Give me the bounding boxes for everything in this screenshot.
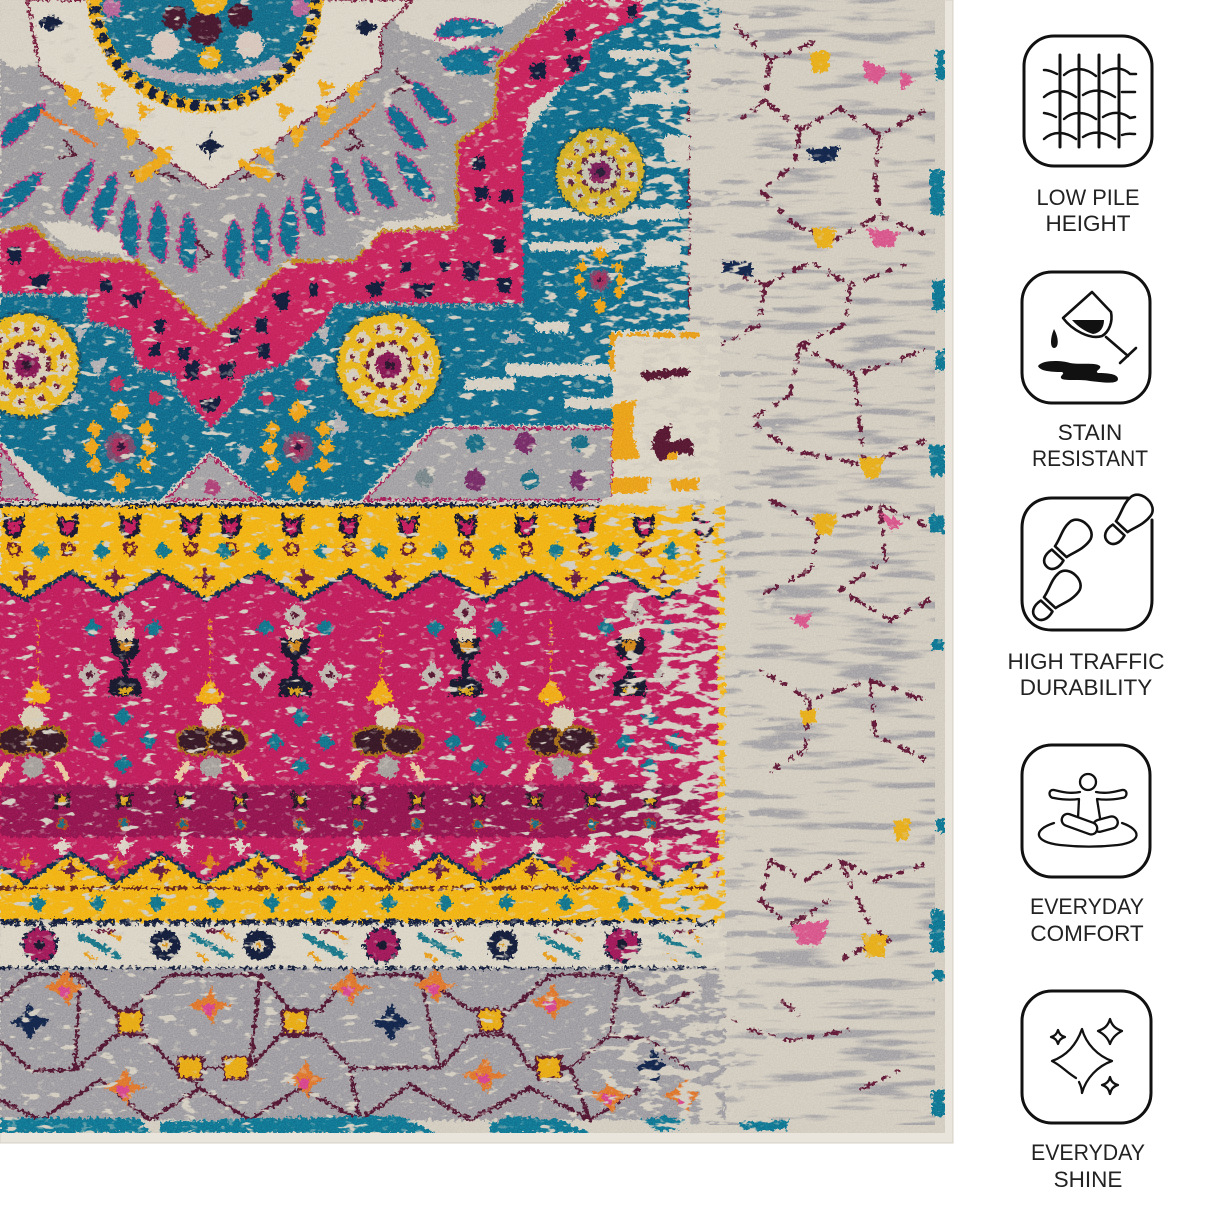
feature icon: everyday comfort	[1022, 745, 1150, 877]
central pink band	[0, 572, 718, 883]
label: stain resistant: RESISTANT	[1032, 446, 1148, 471]
rosette spiked edge	[87, 0, 323, 113]
navy dots on pink	[8, 5, 638, 412]
cream patches in grey field	[0, 0, 540, 255]
dark pink row	[0, 785, 700, 837]
small grey stars	[62, 325, 525, 465]
teal outer edge blotches	[930, 50, 945, 1116]
label: everyday shine: EVERYDAY	[1031, 1140, 1145, 1165]
label: low pile height: LOW PILE	[1036, 185, 1140, 210]
maroon scrolls	[60, 70, 410, 262]
label: everyday comfort: COMFORT	[1030, 921, 1144, 946]
teal paisley rays	[0, 16, 504, 278]
faded motifs over the wear	[555, 127, 700, 494]
small pink dots	[110, 377, 309, 405]
yellow drops	[24, 620, 565, 704]
yellow bands	[0, 505, 725, 922]
footprint left lower	[1026, 566, 1086, 627]
patterned rug field	[0, 0, 945, 1133]
pale upper right rosette	[555, 127, 645, 217]
right border coloured flecks	[722, 52, 915, 957]
flower motif right	[573, 245, 627, 315]
rug photograph	[0, 0, 945, 1133]
all-over speckled wear	[0, 0, 945, 1133]
teal field	[0, 0, 720, 500]
left rosette	[0, 312, 80, 418]
pile grain	[0, 0, 945, 1133]
footprint left upper	[1037, 515, 1097, 576]
label: stain resistant: STAIN	[1058, 420, 1122, 445]
label: everyday shine	[1031, 1140, 1145, 1192]
black figures and grey diamonds	[78, 628, 677, 696]
wedge motifs	[204, 433, 590, 496]
puddle	[1038, 361, 1118, 383]
rosette inner ring	[125, 55, 285, 85]
label: high traffic durability: DURABILITY	[1020, 675, 1152, 700]
distressed cream wear fading to the right	[0, 0, 780, 1133]
zigzag outlines	[0, 572, 708, 600]
label: everyday shine: SHINE	[1054, 1167, 1122, 1192]
teal diamond clusters	[89, 707, 684, 775]
seated figure	[1039, 774, 1137, 846]
small diamond row	[83, 598, 677, 637]
right border lattice lines	[710, 25, 930, 1090]
wine	[1072, 320, 1104, 334]
maroon vertical edge	[688, 60, 690, 330]
feature icon: high traffic durability	[1022, 490, 1158, 630]
upper right block ground	[612, 330, 720, 500]
rosette teal body	[100, 0, 310, 100]
lower yellow band motifs	[29, 858, 712, 912]
grey under edge	[0, 295, 523, 430]
figures row	[51, 791, 661, 857]
lower grey wedges	[0, 428, 612, 500]
cream mottling streaks in the teal field	[465, 50, 689, 408]
upper right block motifs	[612, 335, 700, 494]
feature icon: stain resistant	[1022, 272, 1150, 403]
drop	[1051, 329, 1058, 348]
dark blob motifs	[0, 706, 600, 782]
label: stain resistant	[1032, 420, 1148, 471]
rosette petals	[103, 0, 309, 69]
gold dots	[62, 80, 366, 185]
pile lines	[1044, 55, 1136, 147]
label: low pile height: HEIGHT	[1045, 211, 1131, 236]
grey lattice ground	[0, 968, 725, 1120]
pink border band	[0, 0, 643, 430]
label: high traffic durability: HIGH TRAFFIC	[1007, 649, 1165, 674]
feature icon: low pile height	[1024, 36, 1152, 166]
bottom lattice panel	[0, 966, 725, 1120]
footprint right	[1098, 490, 1158, 551]
right border faded grey streaks	[690, 0, 935, 1125]
label: everyday comfort	[1030, 894, 1144, 946]
gold edge line	[0, 3, 563, 331]
cream rosette band	[0, 922, 725, 968]
feature icon: everyday shine	[1022, 991, 1151, 1123]
orange inner chevron	[40, 105, 376, 147]
cream medallion ground	[27, 0, 413, 190]
flower motif left	[82, 399, 158, 495]
orange crosses	[16, 852, 661, 874]
rug edge binding	[0, 0, 953, 1143]
centre rosette	[336, 312, 442, 418]
sparkles	[1051, 1019, 1122, 1094]
upper yellow band motifs	[3, 513, 714, 590]
wine glass	[1063, 292, 1136, 363]
label: low pile height	[1036, 185, 1140, 236]
label: everyday comfort: EVERYDAY	[1030, 894, 1144, 919]
upper grey field	[0, 0, 560, 333]
label: high traffic durability	[1007, 649, 1165, 700]
lattice square and star motifs	[117, 1011, 143, 1033]
lattice lines	[0, 975, 700, 1120]
medallion	[27, 0, 413, 190]
teal bottom edge	[0, 1116, 790, 1133]
navy cross motif	[38, 15, 378, 160]
top teal strokes	[438, 20, 505, 75]
flower motif centre	[260, 399, 336, 495]
rug base cream	[0, 0, 945, 1133]
